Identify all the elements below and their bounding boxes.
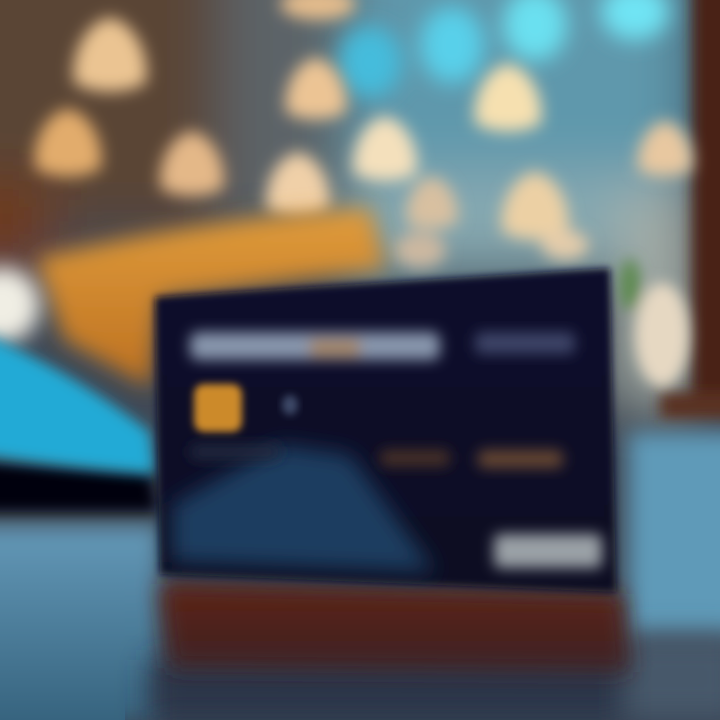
green and white glow right of card: [620, 259, 689, 387]
dark wood post on right: [660, 0, 720, 420]
reddish wood table under card: [160, 584, 630, 672]
right blue panel: [628, 432, 720, 637]
card number blur: [190, 445, 563, 468]
secondary title blur: [475, 332, 575, 354]
card body: [155, 268, 616, 592]
logo badge: [494, 534, 602, 568]
lower left blue surface: [0, 525, 160, 720]
warm pendant lights: [34, 0, 692, 268]
orange counter: [36, 208, 386, 388]
chip: [194, 384, 242, 432]
blue wave on card: [172, 445, 435, 572]
white blob at left: [0, 267, 40, 343]
credit card: [155, 268, 616, 592]
brand name blur: [190, 332, 440, 360]
small mark: [282, 395, 298, 415]
cyan shape at left: [0, 325, 155, 474]
blue ceiling lights: [338, 0, 669, 98]
dark bottom table: [150, 635, 720, 720]
black band at left: [0, 460, 158, 512]
